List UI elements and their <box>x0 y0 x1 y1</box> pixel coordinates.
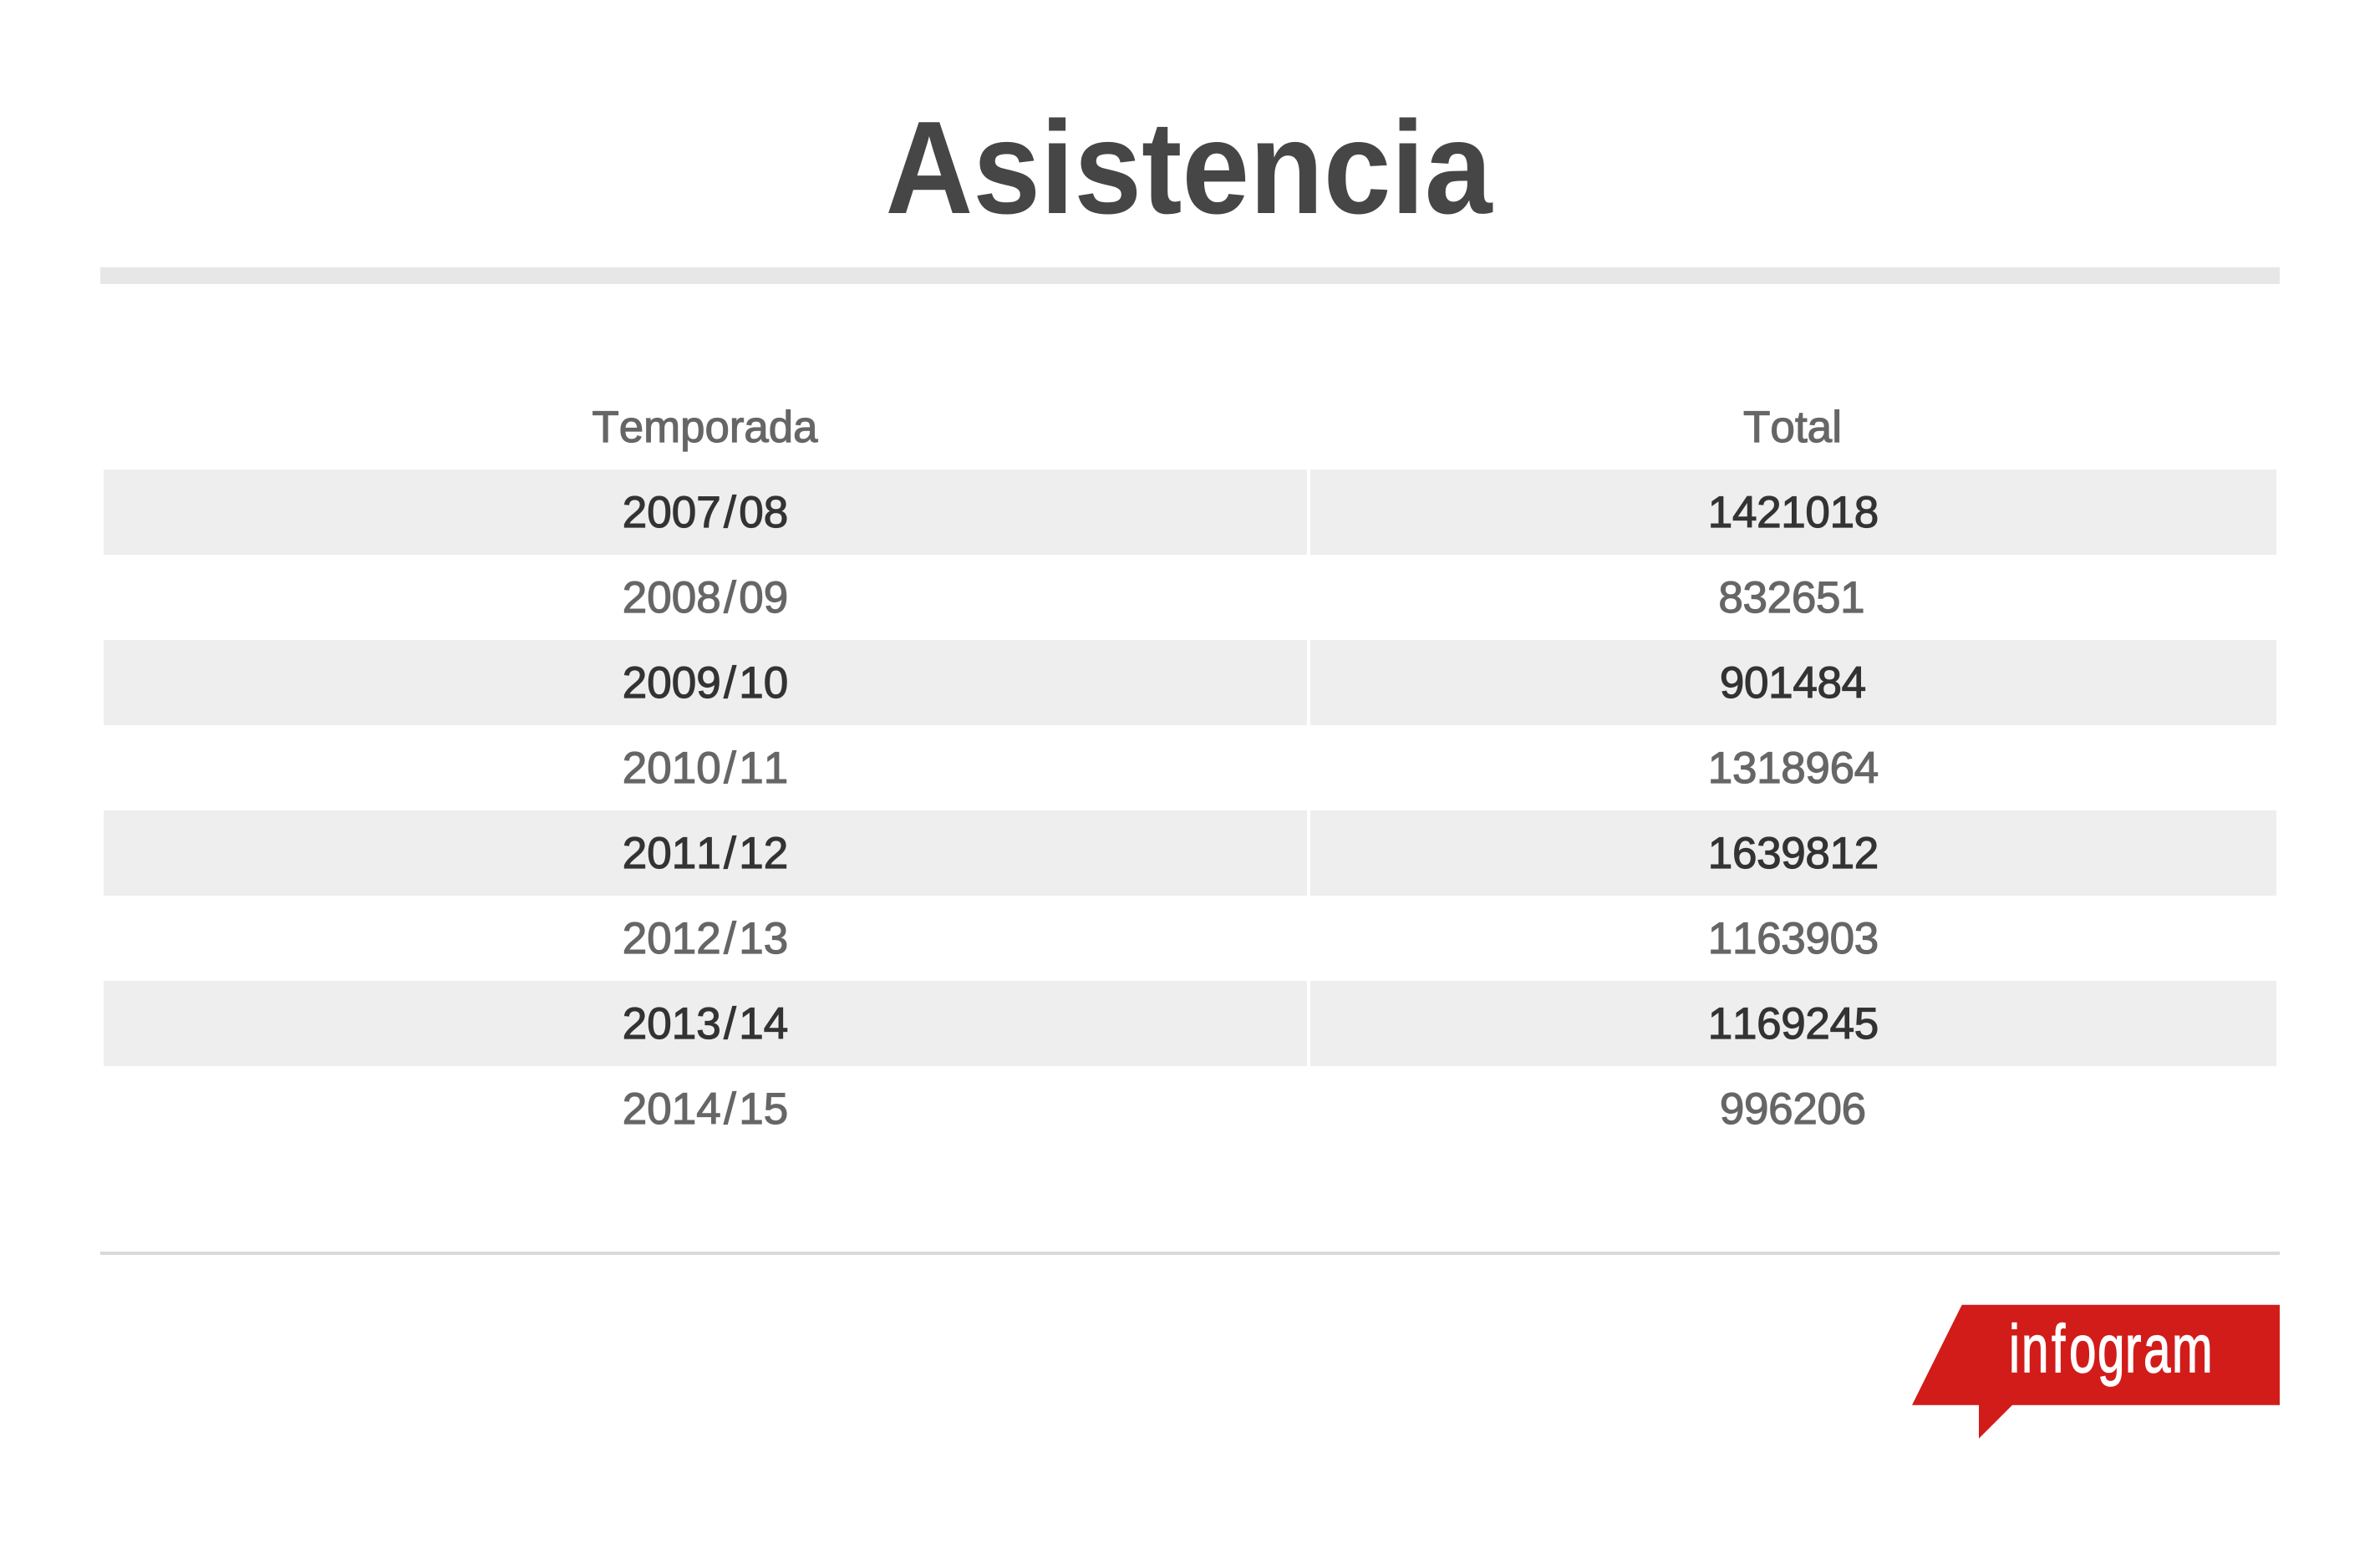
row 2012/13 <box>623 914 1879 963</box>
row 2011/12: 1639812 <box>1708 829 1879 878</box>
row 2011/12: 2011/12 <box>623 829 788 878</box>
title: Asistencia <box>886 94 1493 241</box>
table header <box>592 403 1842 452</box>
row 2014/15: 996206 <box>1720 1084 1866 1134</box>
row 2013/14 <box>104 981 2276 1066</box>
row 2012/13: 1163903 <box>1708 914 1879 963</box>
row 2009/10: 2009/10 <box>623 658 788 708</box>
row 2008/09 <box>623 573 1865 622</box>
footer rule <box>100 1252 2280 1255</box>
row 2010/11 <box>623 744 1879 793</box>
row 2007/08: 1421018 <box>1708 488 1879 537</box>
table header: Temporada <box>592 403 818 452</box>
row 2013/14: 1169245 <box>1708 999 1879 1049</box>
row 2010/11: 1318964 <box>1708 744 1879 793</box>
row 2007/08: 2007/08 <box>623 488 788 537</box>
row 2010/11: 2010/11 <box>623 744 788 793</box>
attendance table <box>104 403 2276 1134</box>
logo wordmark: infogram <box>2009 1311 2213 1386</box>
logo speech-bubble <box>1912 1305 2280 1439</box>
row 2008/09: 2008/09 <box>623 573 788 622</box>
row 2007/08 <box>104 470 2276 555</box>
row 2009/10 <box>104 640 2276 725</box>
row 2008/09: 832651 <box>1718 573 1865 622</box>
row 2013/14: 2013/14 <box>623 999 788 1049</box>
row 2014/15: 2014/15 <box>623 1084 788 1134</box>
title underline bar <box>100 267 2280 284</box>
infogram logo <box>1912 1305 2280 1439</box>
row 2014/15 <box>623 1084 1866 1134</box>
row 2009/10: 901484 <box>1720 658 1866 708</box>
row 2012/13: 2012/13 <box>623 914 788 963</box>
table header: Total <box>1743 403 1842 452</box>
row 2011/12 <box>104 810 2276 896</box>
